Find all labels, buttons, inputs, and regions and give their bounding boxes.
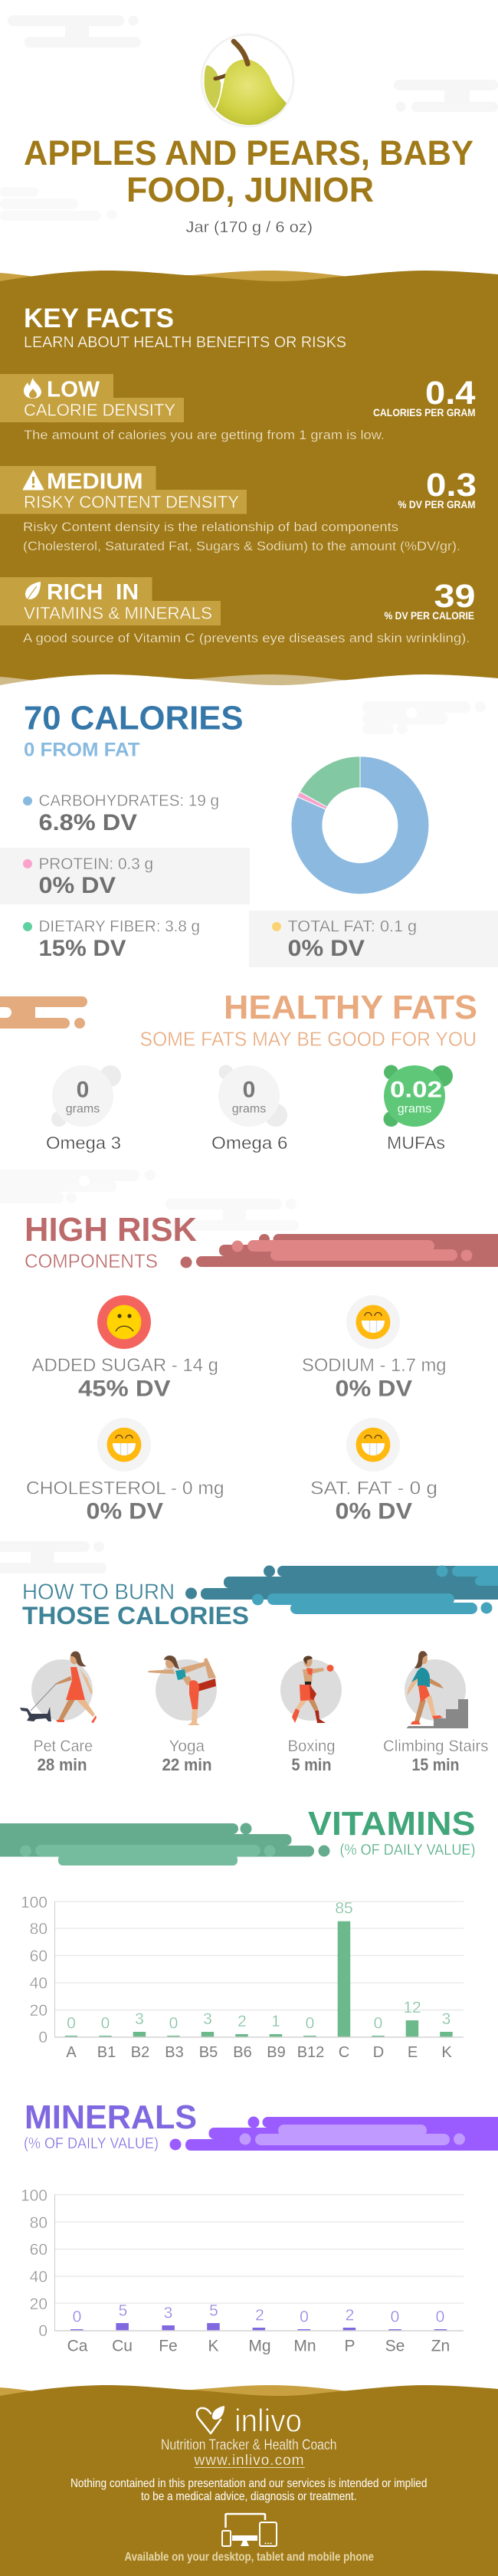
bar chart: minerals: 40	[30, 2269, 48, 2286]
heading: minerals: MINERALS	[25, 2099, 197, 2136]
icon: dog	[20, 1707, 51, 1721]
website link: www.inlivo.com	[193, 2453, 303, 2469]
activity: pet care: 28 min	[37, 1755, 87, 1774]
fact: rich in vitamins and minerals: VITAMINS & MINERALS	[24, 604, 212, 622]
risk: cholesterol: CHOLESTEROL - 0 mg	[26, 1478, 224, 1499]
activity: climbing stairs: Climbing Stairs	[383, 1738, 489, 1755]
bar chart: vitamins: E	[408, 2044, 418, 2061]
bar chart: vitamins: 0	[306, 2014, 314, 2033]
bar chart: vitamins: 0	[101, 2014, 110, 2033]
bar chart: minerals: 0	[436, 2309, 444, 2325]
risk: saturated fat: 0% DV	[336, 1499, 412, 1524]
bar chart: vitamins: D	[373, 2044, 384, 2061]
bar chart: minerals: Ca	[67, 2338, 88, 2354]
bar chart: minerals: 3	[164, 2304, 172, 2322]
subheading: calories from fat: 0 FROM FAT	[24, 739, 139, 760]
stat: omega 6	[211, 1065, 288, 1153]
fact: medium risky content density: MEDIUM	[47, 469, 143, 494]
panel: carbohydrates: 6.8% DV	[38, 810, 137, 835]
icon: devices	[222, 2514, 277, 2546]
bar chart: minerals: 0	[300, 2309, 309, 2325]
risk: added sugar: ADDED SUGAR - 14 g	[32, 1355, 218, 1376]
bar chart: vitamins: 3	[442, 2010, 450, 2028]
fact: medium risky content density: Risky Content density is the relationship of bad components	[23, 520, 398, 534]
bar chart: vitamins: 3	[135, 2010, 144, 2028]
panel: total fat	[249, 911, 498, 967]
bar chart: vitamins: B2	[131, 2044, 149, 2061]
bar chart: vitamins: 0	[67, 2014, 76, 2033]
bar chart: minerals: 20	[30, 2295, 48, 2313]
bar chart: minerals: Cu	[112, 2338, 133, 2354]
fact: rich in vitamins and minerals: A good source of Vitamin C (prevents eye diseases and skin wrinkling).	[23, 631, 470, 645]
risk: saturated fat	[310, 1418, 437, 1524]
activity: pet care: Pet Care	[34, 1738, 93, 1755]
disclaimer	[70, 2477, 428, 2503]
logo: inlivo wordmark: inlivo	[234, 2402, 302, 2439]
bar chart: vitamins: 12	[403, 1999, 421, 2016]
bar chart: vitamins: 0	[374, 2014, 382, 2033]
activity: boxing: 5 min	[291, 1755, 331, 1774]
activity: yoga	[148, 1656, 217, 1774]
risk: sodium: SODIUM - 1.7 mg	[302, 1355, 446, 1376]
panel: carbohydrates: CARBOHYDRATES: 19 g	[38, 792, 219, 809]
bar chart: vitamins: 3	[203, 2010, 212, 2028]
bar chart: vitamins: 20	[30, 2002, 48, 2020]
bar chart: vitamins: 1	[271, 2013, 280, 2030]
risk: cholesterol	[26, 1418, 224, 1524]
fact: low calorie density: 0.4	[425, 375, 476, 412]
bar chart: vitamins: B3	[165, 2044, 184, 2061]
serving size: Jar (170 g / 6 oz)	[185, 219, 313, 236]
bar chart: minerals: 5	[209, 2302, 218, 2319]
bar chart: minerals: 2	[346, 2307, 354, 2324]
bar chart: minerals: K	[208, 2338, 219, 2354]
tagline: Nutrition Tracker & Health Coach	[161, 2437, 337, 2453]
food image: pear	[201, 34, 293, 126]
fact: rich in vitamins and minerals: RICH IN	[47, 580, 139, 605]
disclaimer: to be a medical advice, diagnosis or treatment.	[141, 2490, 357, 2503]
activity: pet care	[20, 1651, 97, 1774]
heading: how to burn: HOW TO BURN	[22, 1580, 175, 1605]
risk: cholesterol: 0% DV	[86, 1499, 163, 1524]
bar chart: vitamins: B1	[97, 2044, 116, 2061]
bar chart: vitamins: 100	[21, 1894, 48, 1911]
bar chart: minerals: P	[344, 2338, 355, 2354]
bar chart: vitamins: 40	[30, 1974, 48, 1993]
bar chart: minerals: Fe	[159, 2338, 178, 2354]
risk: added sugar: 45% DV	[78, 1377, 170, 1401]
bar chart: vitamins: B6	[233, 2044, 252, 2061]
panel: dietary fiber: 15% DV	[38, 936, 126, 961]
bar chart: minerals: 0	[38, 2322, 48, 2340]
fact: rich in vitamins and minerals	[0, 577, 475, 645]
fact: medium risky content density: RISKY CONTENT DENSITY	[24, 492, 239, 512]
decorative band: vitamins	[0, 1823, 329, 1866]
bar chart: vitamins: B12	[297, 2044, 324, 2061]
fact: low calorie density: LOW	[47, 377, 100, 402]
activity: yoga: 22 min	[162, 1755, 211, 1774]
fact: low calorie density: CALORIES PER GRAM	[373, 407, 475, 418]
bar chart: minerals: Se	[385, 2338, 405, 2354]
bar chart: minerals: 60	[30, 2241, 48, 2259]
stat: omega 6: grams	[232, 1102, 266, 1116]
fact: medium risky content density: 0.3	[426, 467, 477, 504]
bar chart: vitamins: C	[339, 2044, 349, 2061]
panel: key facts background	[0, 271, 498, 690]
title: APPLES AND PEARS, BABY	[24, 133, 473, 172]
bar chart: vitamins: 60	[30, 1948, 48, 1965]
fact: low calorie density: The amount of calories you are getting from 1 gram is low.	[24, 428, 385, 442]
bar chart: minerals: Mn	[293, 2338, 316, 2354]
activity: climbing stairs	[383, 1651, 489, 1774]
stat: mufas: grams	[398, 1102, 431, 1116]
subheading: minerals: (% OF DAILY VALUE)	[24, 2135, 159, 2152]
stat: omega 6: Omega 6	[211, 1133, 288, 1153]
bar chart: minerals: 2	[255, 2307, 264, 2324]
bar chart: minerals: Mg	[248, 2338, 271, 2354]
fact: low calorie density: CALORIE DENSITY	[24, 400, 175, 420]
activity: yoga: Yoga	[169, 1738, 205, 1755]
icon: leaf	[25, 582, 41, 599]
panel: footer	[0, 2385, 498, 2576]
activity: climbing stairs: 15 min	[412, 1755, 460, 1774]
subheading: healthy fats: SOME FATS MAY BE GOOD FOR YOU	[139, 1027, 477, 1050]
panel: protein	[0, 848, 250, 904]
heading: key facts: KEY FACTS	[24, 304, 174, 333]
bar chart: vitamins: 0	[38, 2029, 48, 2046]
bar chart: minerals: 5	[119, 2302, 127, 2319]
logo: inlivo heart	[197, 2406, 224, 2433]
icon: warning triangle	[23, 471, 44, 490]
bar chart: minerals: 100	[21, 2187, 48, 2204]
donut chart: macronutrients	[291, 756, 429, 894]
bar chart: minerals: Zn	[431, 2338, 450, 2354]
panel: dietary fiber: DIETARY FIBER: 3.8 g	[38, 918, 200, 935]
bar chart: vitamins: K	[441, 2044, 452, 2061]
panel: total fat: TOTAL FAT: 0.1 g	[288, 918, 417, 935]
heading: high risk: HIGH RISK	[25, 1211, 197, 1249]
bar chart: minerals: 80	[30, 2214, 48, 2232]
disclaimer: Nothing contained in this presentation and our services is intended or implied	[70, 2477, 428, 2490]
icon: flame	[24, 378, 41, 399]
fact: rich in vitamins and minerals: % DV PER CALORIE	[385, 610, 474, 622]
fact: rich in vitamins and minerals: 39	[434, 578, 475, 615]
bar chart: vitamins: 0	[169, 2014, 178, 2033]
panel: protein: 0% DV	[38, 873, 116, 898]
stat: omega 3: 0	[77, 1078, 89, 1102]
subheading: vitamins: (% OF DAILY VALUE)	[340, 1842, 475, 1859]
bar chart: vitamins: A	[66, 2044, 77, 2061]
stat: omega 6: 0	[243, 1078, 255, 1102]
stat: mufas	[383, 1065, 453, 1153]
activity: boxing: Boxing	[288, 1738, 336, 1755]
bar chart: minerals: 0	[391, 2309, 399, 2325]
panel: carbohydrates	[23, 792, 219, 835]
heading: calories: 70 CALORIES	[24, 699, 244, 737]
subheading: components: COMPONENTS	[25, 1251, 158, 1272]
bar chart: minerals	[21, 2187, 464, 2354]
panel: dietary fiber	[23, 918, 200, 961]
stat: mufas: MUFAs	[387, 1133, 445, 1153]
decorative band: burn calories	[185, 1565, 498, 1614]
fact: medium risky content density: (Cholesterol, Saturated Fat, Sugars & Sodium) to the amount (%DV/gr).	[23, 539, 460, 553]
stat: omega 3	[46, 1065, 121, 1153]
heading: healthy fats: HEALTHY FATS	[224, 989, 477, 1026]
heading: those calories: THOSE CALORIES	[22, 1602, 249, 1629]
bar chart: vitamins: 80	[30, 1921, 48, 1938]
risk: sodium: 0% DV	[336, 1377, 412, 1401]
panel: protein: PROTEIN: 0.3 g	[38, 855, 153, 873]
title	[24, 133, 473, 209]
stat: omega 3: grams	[66, 1102, 100, 1116]
fact: medium risky content density: % DV PER GRAM	[398, 499, 475, 510]
decorative band: minerals	[170, 2117, 498, 2151]
subheading: key facts: LEARN ABOUT HEALTH BENEFITS OR RISKS	[24, 334, 346, 351]
fact: low calorie density	[0, 374, 476, 442]
decorative band: high risk	[181, 1234, 498, 1268]
fact: medium risky content density	[0, 466, 477, 553]
stat: omega 3: Omega 3	[46, 1133, 121, 1153]
bar chart: vitamins: 2	[238, 2013, 247, 2030]
bar chart: vitamins: 85	[335, 1899, 353, 1918]
bar chart: vitamins: B9	[267, 2044, 286, 2061]
activity: boxing	[280, 1656, 342, 1774]
title: FOOD, JUNIOR	[126, 170, 374, 209]
availability note: Available on your desktop, tablet and mobile phone	[124, 2551, 374, 2564]
stat: mufas: 0.02	[390, 1078, 442, 1102]
risk: saturated fat: SAT. FAT - 0 g	[310, 1478, 437, 1499]
bar chart: vitamins	[21, 1894, 464, 2061]
risk: sodium	[302, 1295, 446, 1401]
bar chart: minerals: 0	[73, 2309, 81, 2325]
panel: total fat: 0% DV	[288, 936, 365, 961]
heading: vitamins: VITAMINS	[308, 1805, 475, 1843]
bar chart: vitamins: B5	[199, 2044, 218, 2061]
risk: added sugar	[32, 1295, 218, 1401]
